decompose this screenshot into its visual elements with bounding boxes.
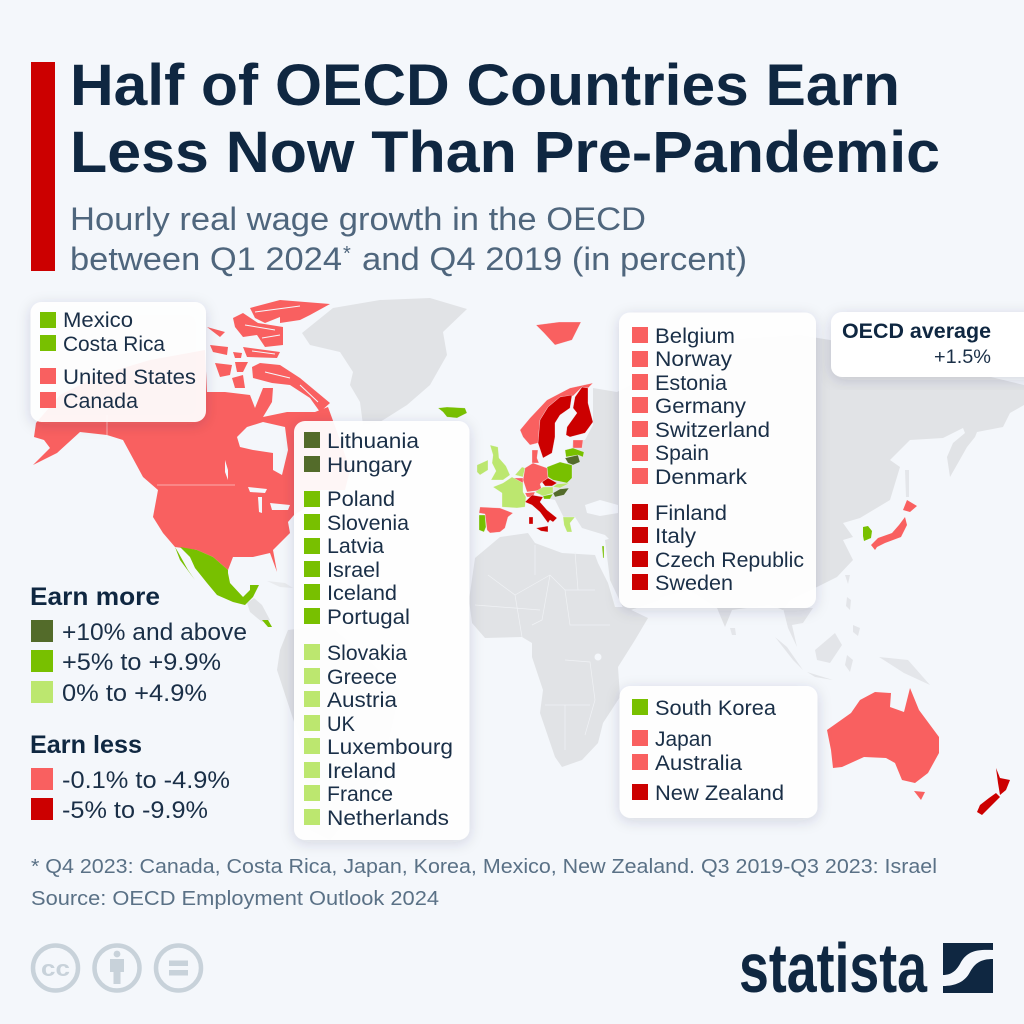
legend row: -5% to -9.9%: -5% to -9.9% (62, 797, 208, 824)
legend: earn more: Earn more (30, 583, 160, 611)
Finland (566, 387, 593, 437)
panel: Asia-Pacific (620, 686, 818, 818)
Estonia row: Estonia (655, 372, 727, 395)
Switzerland (525, 492, 535, 497)
Iceland row: Iceland (327, 582, 397, 605)
Italy row: Italy (655, 525, 697, 548)
Poland row: Poland (327, 488, 395, 511)
title: Less Now Than Pre-Pandemic (70, 120, 940, 185)
subtitle: between Q1 2024 (70, 241, 342, 277)
Latvia row: Latvia (327, 535, 384, 558)
Spain row (632, 442, 709, 465)
grey land: South-East Asia and Indonesia (730, 470, 930, 685)
Svalbard (536, 322, 581, 345)
Ireland (477, 460, 488, 475)
Canada row: Canada (63, 390, 138, 413)
Mexico (175, 547, 259, 605)
icon: no derivatives (156, 946, 201, 990)
Slovakia row: Slovakia (327, 642, 407, 665)
Japan row: Japan (655, 728, 712, 751)
Hudson Bay and Great Lakes (225, 398, 291, 513)
Latvia row (304, 535, 384, 558)
legend row: 0% to +4.9%: 0% to +4.9% (62, 680, 207, 707)
title (70, 53, 940, 185)
France row: France (327, 783, 393, 806)
Costa Rica row: Costa Rica (63, 333, 165, 356)
grey land: Greenland (302, 298, 467, 425)
Austria row: Austria (327, 689, 397, 712)
Poland (547, 462, 572, 483)
UK (490, 445, 510, 480)
world map (33, 298, 1024, 840)
icon: attribution (94, 946, 140, 990)
Israel row: Israel (327, 559, 380, 582)
Portugal row: Portugal (327, 606, 410, 629)
icon: statista mark (943, 943, 993, 993)
legend row: +10% and above: +10% and above (62, 619, 247, 646)
Slovenia (543, 494, 553, 499)
Denmark row: Denmark (655, 466, 748, 489)
red title bar (31, 62, 55, 271)
UK row (304, 713, 355, 736)
Czech Republic (542, 478, 557, 486)
Hungary (553, 488, 569, 497)
Norway row: Norway (655, 348, 733, 371)
Lithuania row: Lithuania (327, 430, 419, 453)
Estonia (573, 440, 583, 448)
Czech Republic row: Czech Republic (655, 549, 804, 572)
Latvia (565, 448, 584, 457)
Belgium row: Belgium (655, 325, 735, 348)
legend: earn less (30, 731, 230, 824)
France (493, 477, 526, 508)
panel: Americas (30, 302, 206, 422)
source: Source: OECD Employment Outlook 2024 (31, 888, 439, 910)
Ireland row (304, 760, 396, 783)
Hungary row: Hungary (327, 454, 413, 477)
Italy (525, 495, 557, 532)
panel: OECD average: OECD average (842, 320, 991, 343)
Germany row: Germany (655, 395, 747, 418)
New Zealand (977, 768, 1010, 815)
Belgium (513, 478, 523, 483)
Netherlands (515, 467, 525, 477)
Lithuania (565, 455, 580, 465)
title: Half of OECD Countries Earn (70, 53, 900, 118)
panel: Europe, earning less (619, 312, 816, 608)
Israel (602, 546, 604, 558)
New Zealand row: New Zealand (655, 782, 784, 805)
legend row: +5% to +9.9%: +5% to +9.9% (62, 649, 221, 676)
Italy row (632, 525, 697, 548)
Australia (827, 688, 939, 783)
subtitle: * (343, 243, 351, 265)
panel: OECD average (831, 312, 1024, 377)
grey land: Eurasia (540, 335, 1024, 627)
legend: earn more (30, 583, 247, 707)
Greece (563, 517, 575, 532)
Costa Rica (262, 620, 272, 627)
Europe (438, 322, 604, 558)
Japan (871, 500, 917, 550)
borders of Canada (107, 415, 235, 485)
Spain row: Spain (655, 442, 709, 465)
Lake Victoria (594, 654, 602, 660)
Norway (520, 383, 593, 445)
UK row: UK (327, 713, 355, 736)
United States row: United States (63, 366, 196, 389)
Slovenia row: Slovenia (327, 512, 409, 535)
Austria (535, 487, 553, 496)
grey land: Black Sea cut-out (585, 500, 618, 516)
grey land: Africa (469, 533, 648, 767)
subtitle (70, 201, 747, 277)
Sweden row: Sweden (655, 572, 733, 595)
Spain (479, 507, 513, 533)
Switzerland row: Switzerland (655, 419, 770, 442)
grey land: Central and South America (247, 581, 400, 840)
Mexico row: Mexico (63, 309, 133, 332)
Israel row (304, 559, 380, 582)
icon: creative commons: cc (41, 956, 70, 981)
panel: OECD average: +1.5% (934, 347, 991, 368)
Slovakia (553, 483, 570, 488)
grey land: Arabia (605, 530, 660, 612)
Sweden (538, 395, 572, 458)
legend: earn less: Earn less (30, 731, 142, 759)
Greece row: Greece (327, 666, 397, 689)
African borders (475, 545, 610, 750)
panel: Europe and others, earning more (294, 421, 470, 840)
Ireland row: Ireland (327, 760, 396, 783)
Netherlands row: Netherlands (327, 807, 449, 830)
icon: creative commons (33, 946, 78, 990)
Iceland (438, 407, 467, 418)
legend row: -0.1% to -4.9%: -0.1% to -4.9% (62, 767, 230, 794)
Portugal (479, 515, 486, 532)
Tasmania (914, 791, 925, 800)
South Korea (863, 526, 872, 541)
Germany (523, 463, 548, 492)
subtitle: Hourly real wage growth in the OECD (70, 201, 646, 237)
Australia row: Australia (655, 752, 742, 775)
footnote: * Q4 2023: Canada, Costa Rica, Japan, Korea, Mexico, New Zealand. Q3 2019-Q3 2023: Israel (31, 856, 937, 878)
Denmark (532, 450, 539, 463)
logo: statista: statista (739, 929, 928, 1007)
Canada and United States (33, 300, 350, 572)
subtitle: and Q4 2019 (in percent) (362, 241, 747, 277)
Finland row: Finland (655, 502, 727, 525)
South Korea row: South Korea (655, 697, 776, 720)
arctic fjords (245, 306, 318, 402)
Luxembourg row: Luxembourg (327, 736, 453, 759)
